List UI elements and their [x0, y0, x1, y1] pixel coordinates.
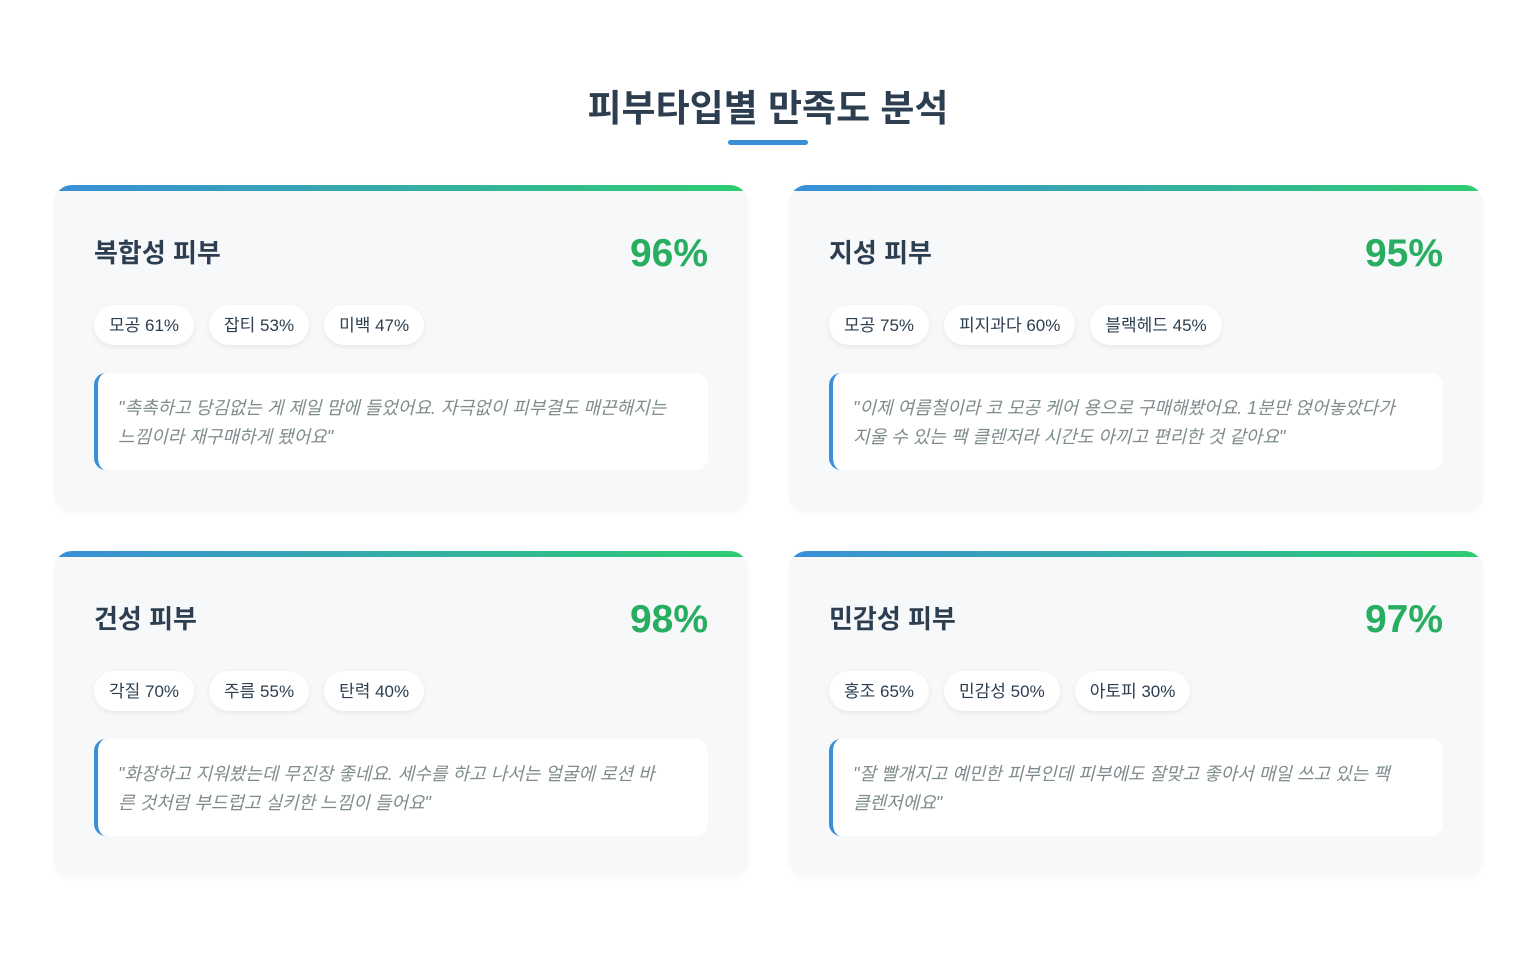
tags: 잡티 53%	[224, 316, 294, 335]
heading: 민감성 피부	[829, 604, 956, 634]
heading: 지성 피부	[829, 238, 932, 268]
tags	[94, 671, 424, 713]
tags: 모공 75%	[844, 316, 914, 335]
heading: 건성 피부	[94, 604, 197, 634]
heading: 복합성 피부	[94, 238, 221, 268]
tags: 미백 47%	[339, 316, 409, 335]
tags: 민감성 50%	[959, 682, 1045, 701]
tags: 모공 61%	[109, 316, 179, 335]
panel: combination skin	[54, 185, 748, 511]
tags	[830, 671, 1190, 713]
quote: "촉촉하고 당김없는 게 제일 맘에 들었어요. 자극없이 피부결도 매끈해지는 느낌이라 재구매하게 됐어요"	[118, 398, 666, 447]
tags: 탄력 40%	[339, 682, 409, 701]
quote: "잘 빨개지고 예민한 피부인데 피부에도 잘맞고 좋아서 매일 쓰고 있는 팩 클렌저에요"	[853, 764, 1390, 813]
quote	[94, 739, 708, 836]
title underline	[728, 140, 808, 145]
tags: 블랙헤드 45%	[1105, 316, 1207, 335]
tags: 아토피 30%	[1090, 682, 1175, 701]
quote: 른 것처럼 부드럽고 실키한 느낌이 들어요"	[118, 793, 431, 813]
title: 피부타입별 만족도 분석	[588, 88, 948, 129]
tags: 주름 55%	[224, 682, 294, 701]
tags	[94, 305, 424, 347]
tags: 피지과다 60%	[959, 316, 1060, 335]
quote	[94, 373, 708, 470]
quote	[829, 739, 1443, 836]
quote: "화장하고 지워봤는데 무진장 좋네요. 세수를 하고 나서는 얼굴에 로션 바	[118, 764, 655, 784]
panel: oily skin	[789, 185, 1483, 511]
tags	[830, 305, 1222, 347]
quote	[829, 373, 1443, 470]
panel: dry skin	[54, 551, 748, 877]
percentage: 97%	[1365, 598, 1443, 641]
quote: "이제 여름철이라 코 모공 케어 용으로 구매해봤어요. 1분만 얹어놓았다가 지울 수 있는 팩 클렌저라 시간도 아끼고 편리한 것 같아요"	[853, 398, 1395, 447]
tags: 각질 70%	[109, 682, 179, 701]
percentage: 98%	[630, 598, 708, 641]
panel: sensitive skin	[789, 551, 1483, 877]
percentage: 96%	[630, 232, 708, 275]
tags: 홍조 65%	[844, 682, 914, 701]
percentage: 95%	[1365, 232, 1443, 275]
